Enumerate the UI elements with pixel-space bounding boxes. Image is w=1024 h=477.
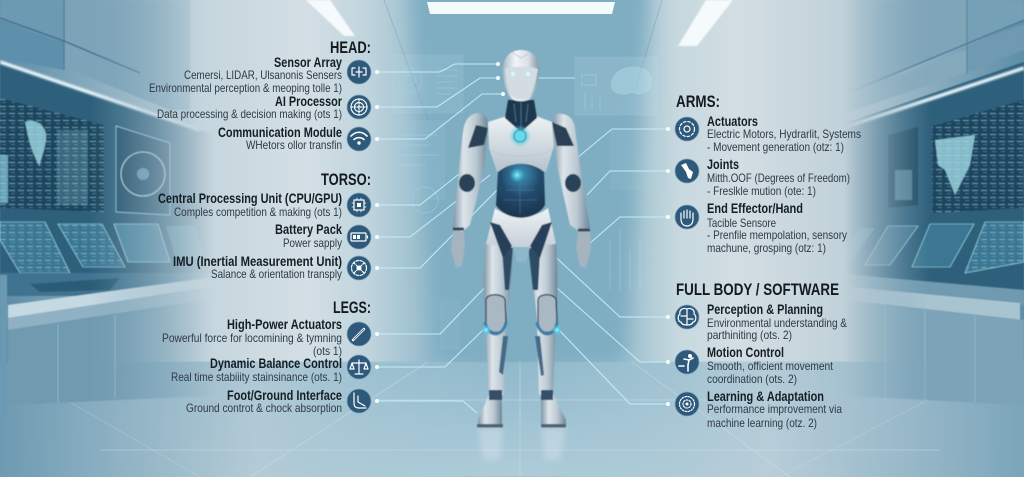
right light strip — [849, 65, 1024, 126]
component: Foot/Ground Interface — [186, 387, 371, 415]
component: End Effector/Hand: - Prenfile mempolation, sensory — [707, 228, 847, 242]
left light strip — [0, 62, 200, 130]
right arm — [552, 114, 590, 232]
component: End Effector/Hand: End Effector/Hand — [707, 200, 803, 216]
component: AI Processor — [157, 93, 371, 121]
component: End Effector/Hand — [675, 200, 847, 255]
component: Learning & Adaptation: Learning & Adaptation — [707, 388, 824, 404]
floor — [0, 362, 1024, 477]
heading: FULL BODY / SOFTWARE: FULL BODY / SOFTWARE — [676, 280, 839, 299]
heading: LEGS: LEGS: — [333, 298, 371, 317]
component: AI Processor: Data processing & decision making (ots 1) — [157, 107, 342, 121]
component: Communication Module — [218, 124, 371, 152]
component: Joints: Joints — [707, 156, 739, 172]
hologram panel: left upper — [392, 55, 463, 350]
component: Motion Control: Motion Control — [707, 344, 784, 360]
component: Dynamic Balance Control: Real time stabiiity stainsinance (ots. 1) — [171, 370, 342, 384]
component: CPU/GPU: Comples competition & making (ots 1) — [174, 205, 342, 219]
component: Motion Control: Smooth, officient movement — [707, 359, 834, 373]
component: Communication Module: WHetors ollor transfin — [246, 138, 342, 152]
component: IMU: Salance & orientation transply — [211, 267, 342, 281]
section: TORSO — [158, 170, 371, 281]
component: Dynamic Balance Control — [171, 355, 371, 384]
section: LEGS — [162, 298, 371, 415]
component: Actuators — [675, 113, 861, 154]
component: Sensor Array — [149, 54, 371, 95]
hologram panel: right upper with brain — [575, 57, 670, 290]
humanoid robot figure — [451, 50, 591, 460]
feet — [478, 392, 502, 426]
heading: TORSO: TORSO: — [321, 170, 371, 189]
component: Battery Pack: Power sapply — [283, 236, 342, 250]
component: Learning & Adaptation: machine learning (otz. 2) — [707, 416, 817, 430]
component: CPU/GPU — [158, 190, 371, 219]
right hand — [576, 228, 591, 268]
heading: ARMS: ARMS: — [676, 92, 720, 111]
section: ARMS — [675, 92, 861, 255]
component: CPU/GPU: Central Processing Unit (CPU/GPU) — [158, 190, 342, 206]
chest light — [509, 125, 531, 147]
component: Perception & Planning: Perception & Planning — [707, 301, 823, 317]
component: Perception & Planning: parthiniting (ots. 2) — [707, 328, 792, 342]
component: Perception & Planning — [675, 301, 847, 342]
component: High-Power Actuators — [162, 316, 371, 358]
component: Battery Pack: Battery Pack — [275, 221, 342, 237]
section: FULL BODY / SOFTWARE — [675, 280, 847, 430]
back wall — [410, 0, 650, 362]
neck — [505, 100, 537, 132]
pelvis — [486, 208, 556, 262]
component: High-Power Actuators: High-Power Actuators — [227, 316, 342, 332]
section: HEAD — [149, 38, 371, 152]
abdomen core — [496, 164, 545, 218]
left wall bank — [0, 0, 209, 403]
component: Foot/Ground Interface: Ground controt & chock absorption — [186, 401, 342, 415]
leader lines — [375, 62, 670, 413]
component: Motion Control: coordination (ots. 2) — [707, 372, 797, 386]
component: Communication Module: Communication Module — [218, 124, 342, 140]
component: Dynamic Balance Control: Dynamic Balance Control — [210, 355, 342, 371]
heading: HEAD: HEAD: — [330, 38, 371, 57]
component: Joints: - Freslkle mution (ote: 1) — [707, 184, 816, 198]
component: Sensor Array: Cemersi, LIDAR, Ulsanonis Sensers — [184, 68, 342, 82]
component: IMU: IMU (Inertial Measurement Unit) — [173, 253, 342, 269]
right leg — [529, 240, 558, 395]
torso — [488, 116, 554, 172]
component: Sensor Array: Sensor Array — [274, 54, 342, 70]
component: Perception & Planning: Environmental understanding & — [707, 316, 847, 330]
component: Joints — [675, 156, 850, 198]
right wall bank — [850, 0, 1024, 402]
component: End Effector/Hand: Tacible Sensore — [707, 216, 776, 230]
component: Learning & Adaptation — [675, 388, 842, 430]
component: End Effector/Hand: machune, grosping (otz: 1) — [707, 241, 826, 255]
component: Actuators: Electric Motors, Hydrarlit, Systems — [707, 127, 861, 141]
ceiling lights — [427, 2, 615, 14]
left arm — [453, 113, 488, 232]
component: Motion Control — [675, 344, 834, 386]
component: High-Power Actuators: (ots 1) — [313, 344, 342, 358]
head — [503, 50, 539, 101]
component: AI Processor: AI Processor — [275, 93, 342, 109]
component: Learning & Adaptation: Performance improvement via — [707, 402, 842, 416]
left leg — [484, 240, 512, 395]
component: Battery Pack — [275, 221, 371, 250]
component: Foot/Ground Interface: Foot/Ground Interface — [227, 387, 342, 403]
component: High-Power Actuators: Powerful force for locomining & tymning — [162, 331, 342, 345]
component: Joints: Mitth.OOF (Degrees of Freedom) — [707, 171, 850, 185]
component: IMU — [173, 253, 371, 281]
left hand — [451, 230, 465, 268]
component: Actuators: Actuators — [707, 113, 758, 129]
component: Sensor Array: Environmental perception & meoping tolle 1) — [149, 81, 342, 95]
floor reflection — [478, 428, 566, 460]
component: Actuators: - Movement generation (otz: 1) — [707, 140, 844, 154]
